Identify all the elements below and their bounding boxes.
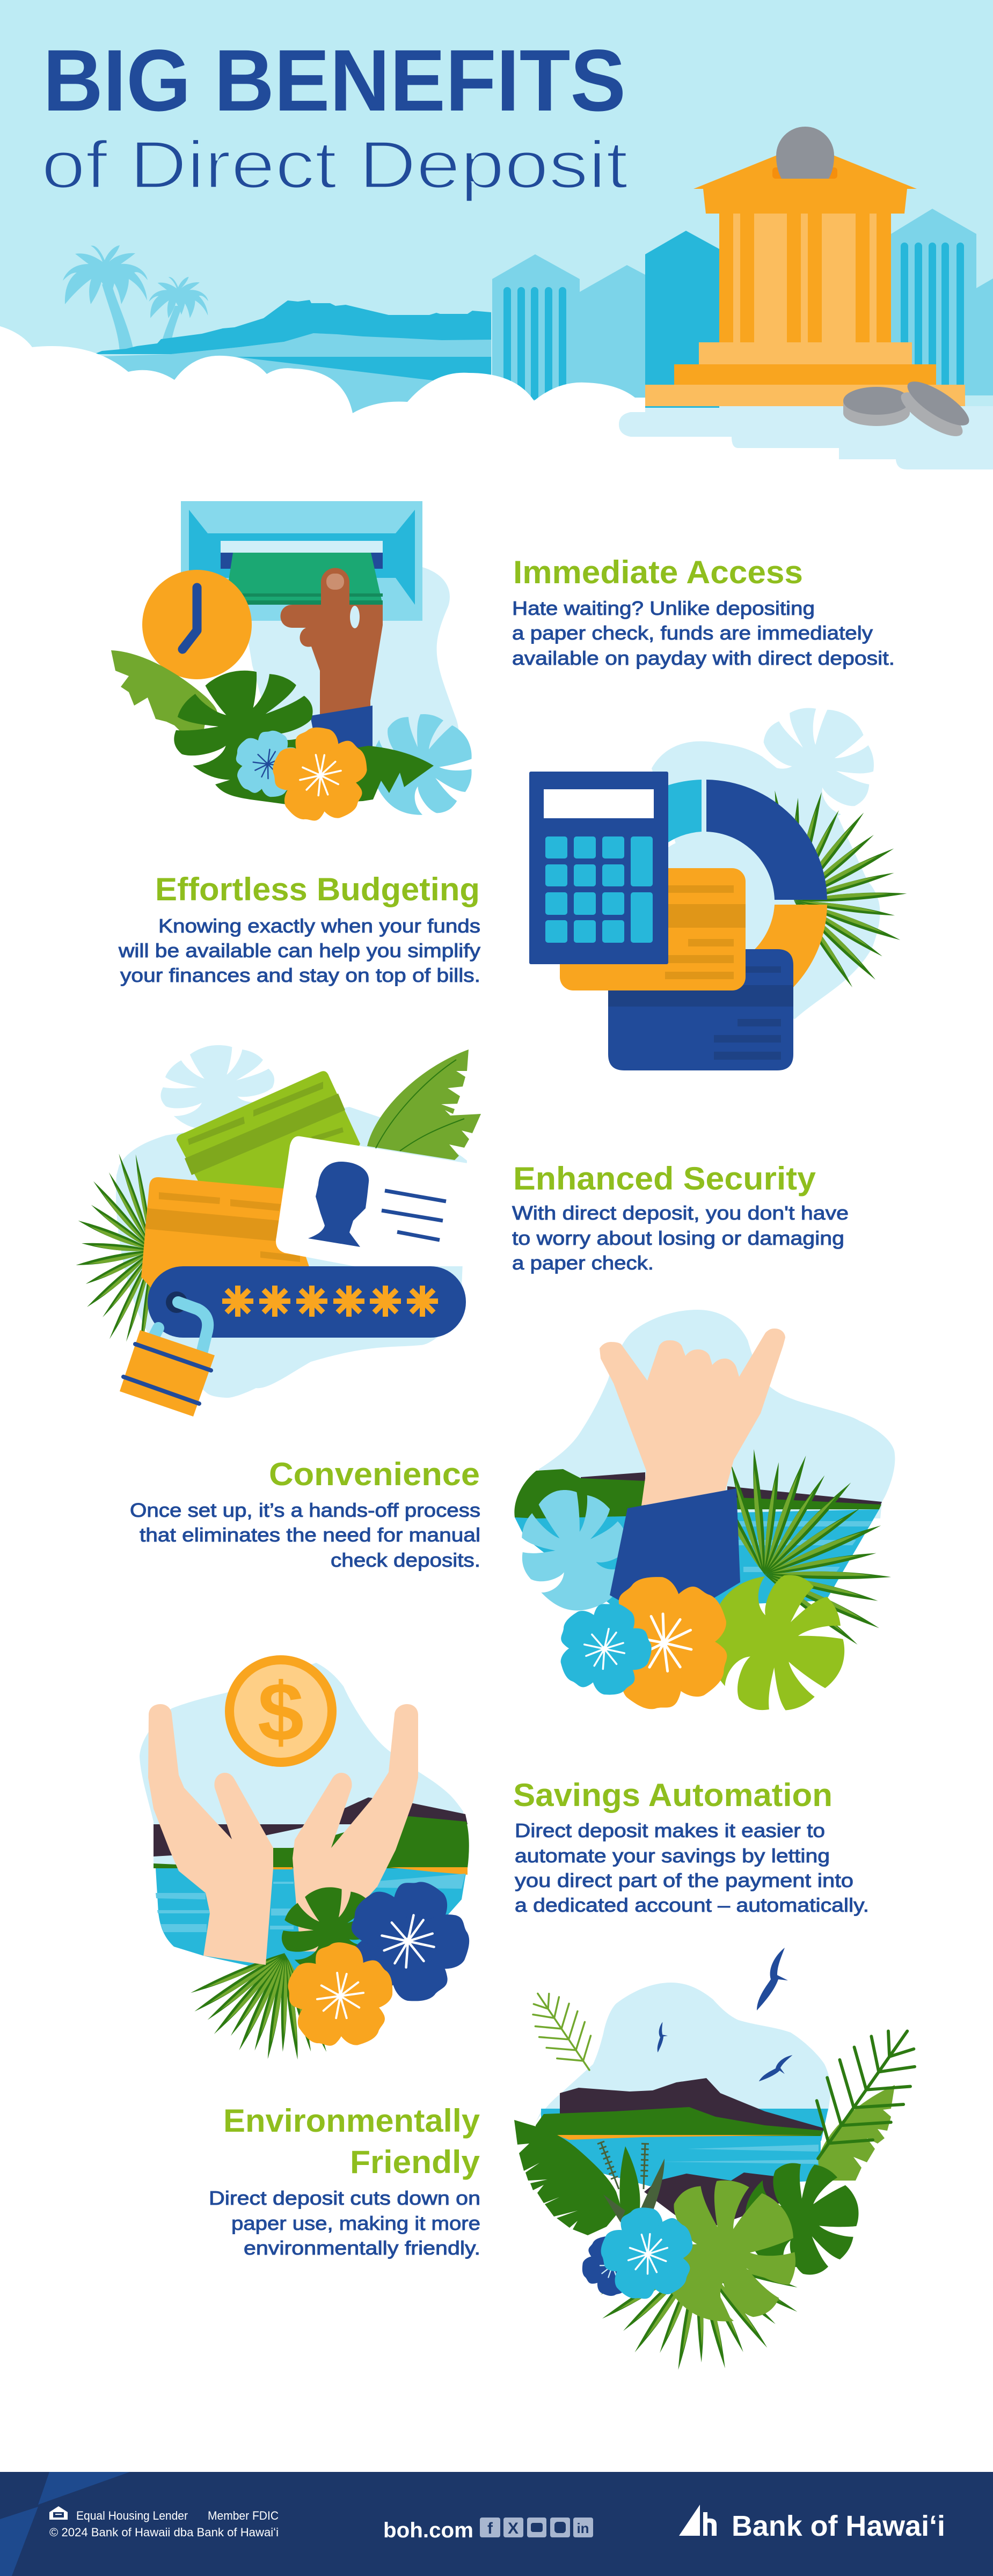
icon: clock (142, 570, 252, 679)
text: Effortless Budgeting: your finances and stay on top of bills. (120, 964, 480, 986)
Bank of Hawaii logo (679, 2505, 945, 2542)
footer background (0, 2472, 993, 2576)
legal text: Equal Housing Lender (76, 2509, 188, 2522)
palm trees (63, 245, 208, 354)
legal text (49, 2509, 279, 2539)
pale sky blob (536, 1983, 831, 2123)
dark green monstera (733, 2149, 872, 2288)
text: Enhanced Security: to worry about losing or damaging (512, 1227, 844, 1249)
palm fronds (76, 1153, 156, 1356)
text: Immediate Access: Immediate Access (513, 554, 803, 590)
landscape (154, 1797, 469, 1996)
footer (0, 2472, 993, 2576)
text: Environmentally Friendly: environmentally friendly. (244, 2237, 480, 2259)
icon: calculator (529, 772, 668, 964)
icon: padlock (120, 1302, 215, 1417)
text: Environmentally Friendly: paper use, making it more (231, 2212, 480, 2234)
text: Enhanced Security: With direct deposit, you don't have (512, 1202, 849, 1224)
pale blob (652, 741, 880, 1019)
diamond head landscape (536, 2078, 828, 2232)
hibiscus flowers (539, 1556, 756, 1735)
panel: effortless budgeting illustration (529, 683, 934, 1070)
panel: savings automation illustration (140, 1655, 491, 2083)
ATM slot panel (181, 501, 422, 621)
text: Savings Automation: a dedicated account – automatically. (515, 1894, 869, 1916)
legal text: Member FDIC (208, 2509, 279, 2522)
palm fronds (176, 1922, 359, 2083)
text: Savings Automation: Savings Automation (513, 1777, 833, 1813)
pale blob (242, 567, 459, 762)
header scene (0, 0, 993, 483)
text: Immediate Access: Hate waiting? Unlike depositing (512, 597, 815, 619)
ID card (276, 1136, 472, 1266)
dark skyline building (645, 231, 719, 408)
text: Effortless Budgeting: will be available can help you simplify (118, 940, 480, 962)
dark green monstera (273, 1877, 389, 1983)
panel: convenience illustration (505, 1310, 934, 1735)
social icons: X (508, 2520, 519, 2537)
text: Immediate Access (512, 554, 895, 669)
text: Convenience: Convenience (269, 1456, 480, 1492)
donut chart (590, 780, 827, 987)
palm fronds (595, 2243, 821, 2381)
birds (651, 1948, 794, 2090)
dark green serrated leaf (514, 2120, 622, 2235)
orange document (560, 868, 746, 990)
pale blob (116, 1107, 467, 1398)
legal text: © 2024 Bank of Hawaii dba Bank of Hawaiʻi (49, 2526, 279, 2539)
text: Immediate Access: a paper check, funds are immediately (512, 622, 873, 644)
Bank of Hawaii logo: Bank of Hawaiʻi (732, 2510, 945, 2542)
text: Savings Automation: you direct part of the payment into (515, 1869, 853, 1891)
tropical leaves and flowers (111, 650, 493, 835)
text: Convenience (130, 1456, 480, 1571)
hibiscus flowers (568, 2199, 707, 2313)
shoreline and water (86, 333, 491, 413)
sleeve (610, 1488, 740, 1626)
coins (843, 374, 975, 444)
pale ground band (619, 406, 993, 469)
orange card (141, 1177, 311, 1293)
text: Enhanced Security (512, 1161, 849, 1274)
pale monstera (736, 683, 897, 843)
panel: enhanced security illustration (76, 1036, 481, 1417)
subtitle: of Direct Deposit (41, 128, 628, 202)
sprigs and grass blades (601, 2142, 665, 2235)
clouds (0, 326, 993, 483)
text: Savings Automation: automate your savings by letting (515, 1845, 830, 1867)
title: BIG BENEFITS (43, 31, 626, 129)
panel: environmentally friendly illustration (514, 1948, 939, 2381)
lime monstera (689, 1554, 866, 1732)
pale blob (537, 1310, 895, 1518)
green card (177, 1071, 360, 1213)
website: boh.com (383, 2519, 473, 2542)
Diamond Head silhouette (94, 300, 491, 354)
blue document (608, 949, 793, 1070)
text: Convenience: Once set up, it’s a hands-off process (130, 1499, 480, 1521)
bank building (645, 127, 965, 406)
text: Convenience: that eliminates the need for manual (140, 1524, 480, 1546)
footer accent shapes (0, 2472, 130, 2576)
banknotes (225, 553, 383, 605)
text: Effortless Budgeting (118, 871, 480, 986)
text: Environmentally Friendly: Direct deposit cuts down on (209, 2187, 480, 2209)
social icons: f (487, 2520, 493, 2537)
text: Enhanced Security: a paper check. (512, 1252, 654, 1274)
palm fronds (753, 758, 934, 999)
palm fronds (683, 1399, 934, 1667)
light green monstera (628, 2151, 827, 2351)
text: Effortless Budgeting: Effortless Budgeting (155, 871, 480, 907)
dollar coin (225, 1655, 337, 1767)
hand (280, 568, 383, 748)
light green leaf (367, 1050, 481, 1160)
icon: equal housing (49, 2506, 68, 2520)
landscape (514, 1469, 882, 1610)
right fern (786, 2009, 939, 2181)
password bar (148, 1266, 466, 1338)
text: Savings Automation: Direct deposit makes it easier to (515, 1819, 825, 1841)
text: Savings Automation (513, 1777, 869, 1916)
cupped hands (148, 1704, 418, 1965)
text: Environmentally Friendly: Friendly (350, 2144, 480, 2180)
social icons: in (576, 2520, 589, 2536)
dollar coin: $ (258, 1665, 304, 1758)
light blue monstera (505, 1475, 644, 1624)
panel: immediate access illustration (111, 501, 493, 835)
text: Environmentally Friendly: Environmentally (223, 2103, 480, 2139)
sky background (0, 0, 993, 461)
light green serrated leaf (818, 2085, 895, 2181)
shaka hand (600, 1329, 785, 1506)
pale monstera (154, 1036, 281, 1138)
ferns (519, 1980, 609, 2083)
pale blob (140, 1663, 468, 1868)
text: Effortless Budgeting: Knowing exactly when your funds (158, 915, 480, 937)
text: Environmentally Friendly (209, 2103, 480, 2259)
text: Immediate Access: available on payday with direct deposit. (512, 647, 895, 669)
text: Convenience: check deposits. (331, 1549, 480, 1571)
text: Enhanced Security: Enhanced Security (513, 1161, 816, 1197)
social icons (480, 2518, 593, 2537)
light skyline buildings (492, 209, 993, 408)
hibiscus flowers (282, 1861, 491, 2054)
